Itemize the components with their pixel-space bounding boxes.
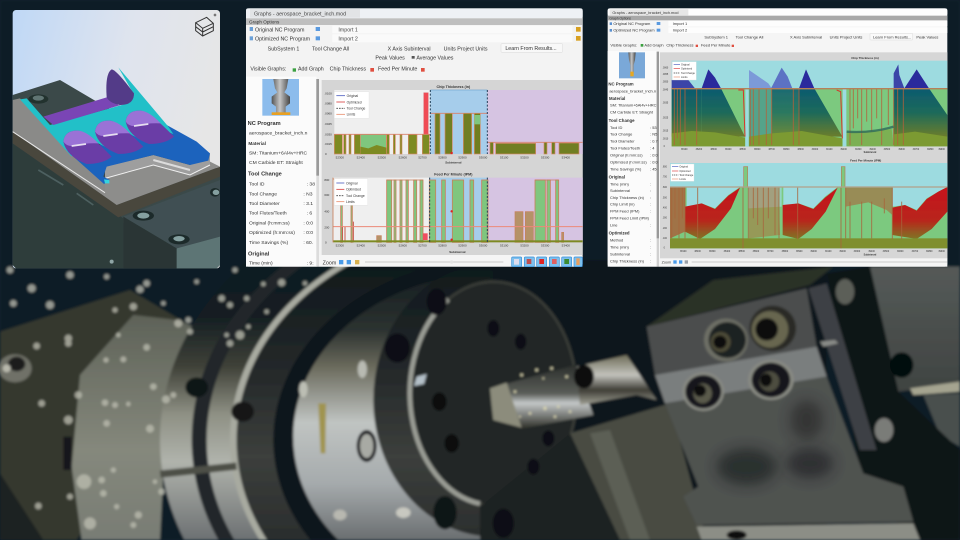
- sidebar with tool details: :: [650, 245, 651, 250]
- sidebar with tool details: Chip Thickness (in): [610, 258, 645, 263]
- chart legend: [671, 164, 694, 181]
- chart: feed per minute: 38400: [724, 251, 731, 253]
- chart: feed per minute: 400: [324, 209, 330, 213]
- sidebar with tool details: : 0:0: [303, 230, 313, 236]
- chart: chip thickness: 38900: [797, 149, 805, 151]
- chart: feed per minute: .300: [662, 217, 668, 219]
- chart: chip thickness: .0030: [324, 133, 332, 137]
- selection controls: Chip Thickness: [666, 42, 694, 47]
- sidebar with tool details: : 4: [650, 145, 655, 150]
- sidebar with tool details: Tool Change: [248, 172, 282, 178]
- chart: feed per minute: 0: [325, 240, 327, 244]
- chart: feed per minute: 39500: [883, 251, 890, 253]
- chart: chip thickness: .0045: [662, 90, 669, 92]
- sidebar with tool details: : 38: [307, 181, 315, 187]
- chart: feed per minute: 38100: [680, 251, 687, 253]
- chart: chip thickness: 53000: [479, 155, 488, 159]
- sidebar with tool details: Optimized: [609, 231, 630, 236]
- chart: chip thickness: 39000: [812, 149, 819, 151]
- chart: chip thickness: Subinterval: [864, 151, 877, 154]
- sidebar with tool details: : N3: [303, 191, 313, 197]
- chart: feed per minute: 39900: [938, 251, 946, 253]
- sidebar with tool details: Optimized (h:mm:ss): [610, 159, 647, 164]
- chart legend: Tool Change: [681, 72, 696, 75]
- dark space behind the chuck: [493, 260, 827, 540]
- chart: chip thickness: 52500: [378, 155, 386, 159]
- sidebar with tool details: FPM Feed Limit (IPM): [610, 215, 650, 220]
- sidebar with tool details: Tool Flutes/Teeth: [249, 211, 287, 217]
- chart: chip thickness: .0060: [662, 67, 669, 69]
- chart: feed per minute: [662, 158, 947, 257]
- chart: chip thickness: 38500: [739, 149, 747, 151]
- sidebar with tool details: Line: [610, 222, 618, 227]
- sidebar with tool details: [246, 77, 319, 267]
- chart: feed per minute: 52700: [418, 244, 427, 248]
- chart: chip thickness: .0035: [662, 102, 669, 104]
- chart: feed per minute: .100: [662, 238, 668, 240]
- sidebar with tool details: Time (min): [610, 181, 630, 186]
- chart: feed per minute: 38800: [782, 251, 789, 253]
- selection controls: X Axis Subinterval: [388, 46, 431, 52]
- selection controls: Average Values: [416, 56, 454, 62]
- chart: feed per minute: 39600: [897, 251, 904, 253]
- selection controls: [610, 33, 938, 47]
- sidebar with tool details: Material: [609, 96, 625, 101]
- graph options: [246, 18, 583, 42]
- chart: chip thickness: 52900: [458, 155, 467, 159]
- chart area background: [322, 80, 583, 255]
- sidebar with tool details: :: [650, 195, 651, 200]
- chart: feed per minute: 52900: [458, 244, 467, 248]
- sidebar with tool details: CM Carbide ET: Straight: [610, 110, 654, 115]
- machine plate with coolant: [0, 290, 203, 540]
- sidebar with tool details: Subinterval: [610, 251, 630, 256]
- chart: feed per minute: .800: [662, 167, 668, 169]
- selection controls: Feed Per Minute: [701, 42, 731, 47]
- sidebar with tool details: Time (min): [249, 261, 273, 267]
- chart: feed per minute: Feed Per Minute (IPM): [434, 173, 473, 177]
- sidebar with tool details: : 3.1: [303, 201, 313, 207]
- sidebar with tool details: Tool Change: [609, 118, 635, 123]
- chart: chip thickness: 39300: [855, 149, 862, 151]
- chart: chip thickness: 53200: [520, 155, 529, 159]
- boring bar shank: [490, 355, 657, 428]
- chuck: [160, 173, 827, 540]
- chart: feed per minute: .500: [662, 197, 668, 199]
- sidebar with tool details: Tool Diameter: [610, 139, 635, 144]
- chart legend: Optimized: [681, 68, 693, 71]
- chart: chip thickness: 0: [664, 146, 666, 148]
- chart: chip thickness: .0080: [324, 101, 332, 105]
- sidebar with tool details: SM: Titanium+6Al4v+HRC: [249, 150, 308, 156]
- selection controls: Add Graph: [298, 66, 324, 72]
- sidebar with tool details: :: [650, 202, 651, 207]
- chart: chip thickness: 39700: [913, 149, 920, 151]
- chart: chip thickness: 38100: [681, 149, 688, 151]
- chart: feed per minute: 38600: [753, 251, 760, 253]
- sidebar with tool details: : 60.: [303, 240, 313, 246]
- sidebar with tool details: FPM Feed (IPM): [610, 209, 640, 214]
- sidebar with tool details: :: [650, 209, 651, 214]
- chart: feed per minute: 52800: [438, 244, 447, 248]
- chart legend: Tool Change: [679, 174, 694, 177]
- chart: chip thickness: 39800: [927, 149, 934, 151]
- sidebar with tool details: Subinterval: [610, 188, 630, 193]
- chart: chip thickness: .0015: [324, 142, 332, 146]
- window header and options: Graphs - aerospace_bracket_inch.mod: [612, 11, 679, 15]
- sidebar with tool details: : N5: [650, 132, 658, 137]
- sidebar with tool details: : 6: [307, 211, 312, 217]
- sidebar with tool details: Tool ID: [249, 181, 265, 187]
- selection controls: Learn From Results...: [505, 46, 557, 52]
- sidebar with tool details: Chip Limit (in): [610, 202, 635, 207]
- chart: feed per minute: 0: [664, 247, 666, 249]
- chart legend: Optimized: [679, 170, 691, 173]
- sidebar with tool details: Tool Change: [249, 191, 277, 197]
- chart: feed per minute: 53300: [541, 244, 550, 248]
- selection controls: Chip Thickness: [330, 66, 366, 72]
- sidebar with tool details: Tool Flutes/Teeth: [610, 145, 640, 150]
- sidebar with tool details: Time (min): [610, 245, 630, 250]
- chart: chip thickness: 52400: [357, 155, 365, 159]
- zoom bar and tool buttons: [319, 255, 582, 267]
- sidebar with tool details: aerospace_bracket_inch.n: [609, 88, 656, 93]
- chart: chip thickness: Chip Thickness (in): [436, 85, 471, 89]
- selection controls: Visible Graphs:: [610, 42, 637, 47]
- sidebar with tool details: :: [650, 188, 651, 193]
- selection controls: Add Graph: [644, 42, 664, 47]
- sidebar with tool details: : 0:0: [650, 152, 659, 157]
- chart legend: [672, 62, 696, 80]
- chart: feed per minute: 53000: [479, 244, 488, 248]
- sidebar with tool details: Original (h:mm:ss): [249, 220, 290, 226]
- chart: feed per minute: 38900: [796, 251, 803, 253]
- chart: chip thickness: 52800: [438, 155, 447, 159]
- chart: chip thickness: 38300: [710, 149, 718, 151]
- chart: chip thickness: 38800: [783, 149, 790, 151]
- chart: chip thickness: 39500: [884, 149, 891, 151]
- chart: chip thickness: 0: [325, 152, 327, 156]
- zoom bar and tool buttons: Zoom: [323, 260, 337, 266]
- chart area background: [660, 52, 947, 259]
- chart legend: Limits: [681, 76, 688, 79]
- chart legend: Original: [679, 166, 688, 169]
- chart: feed per minute: 52500: [378, 244, 386, 248]
- chart: feed per minute: 39700: [912, 251, 919, 253]
- chart: chip thickness: 53300: [541, 155, 550, 159]
- window title bar: Graphs - aerospace_bracket_inch.mod: [254, 11, 346, 17]
- sidebar with tool details: : 0.7: [650, 139, 659, 144]
- chart: chip thickness: 53400: [562, 155, 570, 159]
- chart: chip thickness: 53100: [500, 155, 509, 159]
- chart: chip thickness: 39100: [826, 149, 833, 151]
- chart: chip thickness: .0010: [662, 138, 669, 140]
- chart: feed per minute: .200: [662, 228, 668, 230]
- sidebar with tool details: NC Program: [608, 81, 634, 86]
- chart legend: Original: [347, 94, 358, 98]
- sidebar with tool details: CM Carbide ET: Straight: [249, 160, 303, 166]
- chart legend: Limits: [347, 113, 356, 117]
- bracket plate: [13, 67, 220, 217]
- chart: chip thickness: 52700: [418, 155, 427, 159]
- sidebar with tool details: :: [650, 251, 651, 256]
- tool holder block: [647, 267, 920, 540]
- zoom bar: [659, 258, 947, 267]
- chart: chip thickness: [324, 85, 583, 165]
- window header and options: Graph Options: [609, 17, 631, 21]
- sidebar with tool details: Original: [248, 252, 270, 258]
- chart: feed per minute: Feed Per Minute (IPM): [850, 158, 881, 162]
- chart: feed per minute: 38500: [738, 251, 746, 253]
- chart: feed per minute: 800: [324, 178, 330, 182]
- chart: feed per minute: Subinterval: [449, 250, 466, 254]
- chart: feed per minute: 39100: [825, 251, 832, 253]
- chart: feed per minute: 38200: [694, 251, 702, 253]
- chart: chip thickness: Chip Thickness (in): [851, 56, 879, 60]
- chart legend: Limits: [679, 178, 687, 181]
- zoom bar: Zoom: [662, 261, 671, 265]
- sidebar with tool details: Optimized (h:mm:ss): [249, 230, 295, 236]
- sidebar with tool details: Tool Diameter: [249, 201, 280, 207]
- chart: chip thickness: 38200: [696, 149, 703, 151]
- icon: view cube: [196, 14, 216, 36]
- panel: graphs window with tool change chart: [246, 8, 583, 267]
- chart: feed per minute: 52300: [336, 244, 344, 248]
- window header and options: Import 2: [673, 27, 688, 32]
- window header and options: Optimized NC Program: [613, 27, 655, 32]
- chart: feed per minute: .400: [662, 207, 668, 209]
- fixture blocks: [13, 80, 220, 268]
- selection controls: Tool Change All: [312, 46, 349, 52]
- chart: chip thickness: 39400: [869, 149, 877, 151]
- chart: chip thickness: .0100: [324, 91, 332, 95]
- sidebar with tool details: aerospace_bracket_inch.n: [249, 130, 308, 136]
- holder screws: [683, 279, 913, 442]
- chart: chip thickness: .0050: [662, 81, 669, 83]
- chart: chip thickness: .0055: [662, 74, 669, 76]
- chart legend: [334, 179, 368, 205]
- chart: feed per minute: 38700: [767, 251, 774, 253]
- purple walls and pockets: [43, 69, 174, 164]
- sidebar with tool details: SM: Titanium+6Al4v+HRC: [610, 103, 657, 108]
- selection controls: Tool Change All: [736, 34, 763, 39]
- sidebar with tool details: : 0:0: [650, 159, 659, 164]
- selection controls: [250, 44, 563, 72]
- chart: chip thickness: 52300: [336, 155, 344, 159]
- chart: feed per minute: .600: [662, 187, 668, 189]
- panel: 3D model of machined aerospace bracket: [13, 10, 220, 268]
- sidebar with tool details: Chip Thickness (in): [610, 195, 645, 200]
- sidebar with tool details: : 0:0: [303, 220, 313, 226]
- selection controls: Visible Graphs:: [250, 66, 286, 72]
- chart: feed per minute: .700: [662, 177, 668, 179]
- sidebar with tool details: Time Savings (%): [249, 240, 288, 246]
- chart: feed per minute: 39800: [926, 251, 933, 253]
- selection controls: Peak Values: [916, 34, 938, 39]
- chart: feed per minute: 38300: [709, 251, 716, 253]
- sidebar with tool details: Method: [610, 238, 623, 243]
- graph options: Import 2: [338, 36, 358, 42]
- chart: feed per minute: 39400: [868, 251, 876, 253]
- selection controls: Units Project Units: [830, 34, 862, 39]
- chart: chip thickness: 39200: [840, 149, 848, 151]
- chart: chip thickness: .0045: [324, 122, 332, 126]
- sidebar with tool details: Tool ID: [610, 125, 623, 130]
- chart: chip thickness: [662, 56, 947, 154]
- sidebar with tool details: : 53: [650, 125, 657, 130]
- selection controls: Feed Per Minute: [378, 66, 417, 72]
- chart: feed per minute: [324, 173, 583, 254]
- chart legend: Tool Change: [346, 194, 365, 198]
- selection controls: SubSystem 1: [268, 46, 299, 52]
- chart legend: Optimized: [347, 100, 362, 104]
- window title bar: [246, 8, 583, 18]
- sidebar with tool details: :: [650, 258, 651, 263]
- chart: chip thickness: 39900: [938, 149, 946, 151]
- graph options: Import 1: [338, 27, 358, 33]
- coolant droplets: [7, 267, 307, 529]
- chart: feed per minute: 39000: [810, 251, 818, 253]
- chart: chip thickness: .0015: [662, 131, 669, 133]
- selection controls: Learn From Results...: [873, 34, 911, 39]
- window header and options: [608, 8, 947, 33]
- chart legend: Optimized: [346, 188, 361, 192]
- window header and options: Import 1: [673, 21, 688, 26]
- chart: feed per minute: 53100: [500, 244, 509, 248]
- selection controls: SubSystem 1: [704, 34, 729, 39]
- selection controls: Units Project Units: [444, 46, 488, 52]
- chart: feed per minute: 39200: [839, 251, 847, 253]
- sidebar with tool details: [608, 51, 659, 267]
- sidebar with tool details: NC Program: [248, 121, 281, 127]
- chart: feed per minute: 39300: [854, 251, 861, 253]
- chart legend: Original: [346, 181, 358, 185]
- chart: feed per minute: 52400: [357, 244, 365, 248]
- chart: chip thickness: 38600: [754, 149, 761, 151]
- chart: chip thickness: Subinterval: [445, 161, 462, 165]
- panel: graphs window with all tool changes: [608, 8, 947, 267]
- graph options: Graph Options: [249, 20, 280, 25]
- sidebar with tool details: Original (h:mm:ss): [610, 152, 643, 157]
- chart: chip thickness: 39600: [898, 149, 906, 151]
- sidebar with tool details: Original: [609, 174, 625, 179]
- sidebar with tool details: :: [650, 238, 651, 243]
- chart: chip thickness: .0060: [324, 112, 332, 116]
- chart: feed per minute: 53400: [562, 244, 570, 248]
- sidebar with tool details: Tool Change: [610, 132, 633, 137]
- selection controls: X Axis Subinterval: [790, 34, 822, 39]
- sidebar with tool details: Material: [248, 141, 266, 146]
- chart legend: Original: [681, 63, 690, 66]
- sidebar with tool details: : 9:: [307, 261, 314, 267]
- chart legend: Limits: [346, 200, 355, 204]
- graph options: Optimized NC Program: [255, 36, 311, 42]
- chart: feed per minute: 52600: [399, 244, 407, 248]
- dark area and background behind holder: [480, 267, 960, 540]
- chart: feed per minute: 200: [324, 225, 330, 229]
- chart: feed per minute: Subinterval: [864, 254, 877, 257]
- chart legend: Tool Change: [347, 107, 366, 111]
- sidebar with tool details: :: [650, 222, 651, 227]
- chart legend: [334, 92, 369, 118]
- sidebar with tool details: :: [650, 181, 651, 186]
- window header and options: Original NC Program: [613, 21, 651, 26]
- chart: chip thickness: 52600: [399, 155, 407, 159]
- chart: chip thickness: 38400: [725, 149, 732, 151]
- graph options: Original NC Program: [255, 27, 305, 33]
- sidebar with tool details: Time Savings (%): [610, 166, 642, 171]
- chart: feed per minute: 600: [324, 193, 330, 197]
- chart: chip thickness: 38700: [768, 149, 776, 151]
- chart: feed per minute: 53200: [520, 244, 529, 248]
- sidebar with tool details: : 45: [650, 166, 657, 171]
- chart: chip thickness: .0025: [662, 117, 669, 119]
- selection controls: Peak Values: [375, 55, 405, 61]
